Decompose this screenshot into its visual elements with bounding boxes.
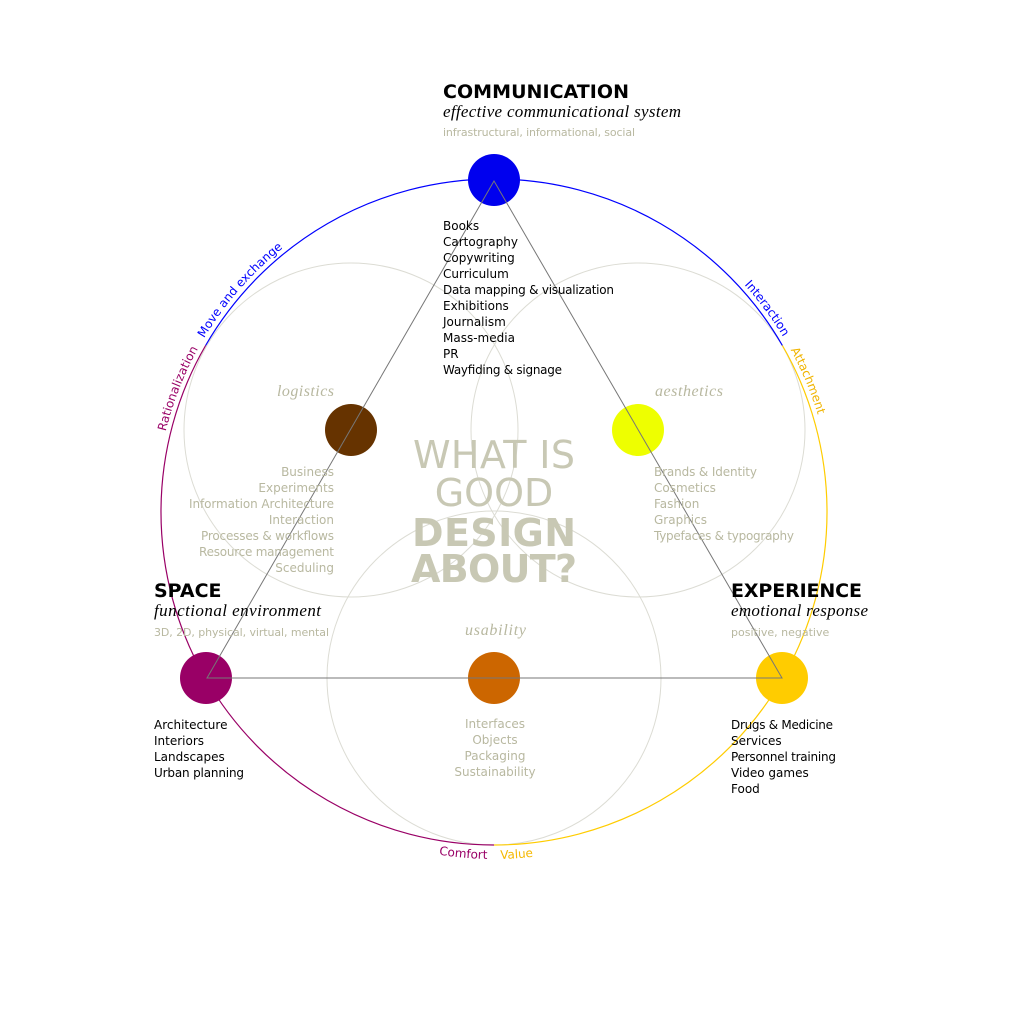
communication list (442, 219, 614, 377)
logistics: Business (281, 465, 334, 479)
experience list: Personnel training (731, 750, 836, 764)
experience heading (731, 580, 868, 639)
communication heading: infrastructural, informational, social (443, 126, 635, 139)
space heading: 3D, 2D, physical, virtual, mental (154, 626, 329, 639)
aesthetics: Typefaces & typography (653, 529, 794, 543)
communication heading: effective communicational system (443, 102, 681, 121)
experience list (731, 718, 836, 796)
logistics: Processes & workflows (201, 529, 334, 543)
center title: ABOUT? (411, 547, 577, 591)
logistics: Interaction (269, 513, 334, 527)
arc labels: Move and exchange (197, 244, 282, 338)
communication list: Copywriting (443, 251, 515, 265)
center title (411, 433, 577, 591)
aesthetics: Cosmetics (654, 481, 716, 495)
aesthetics (653, 383, 794, 543)
communication list: Journalism (442, 315, 506, 329)
triangle (207, 181, 782, 678)
logistics: Information Architecture (189, 497, 334, 511)
experience heading: EXPERIENCE (731, 580, 862, 602)
experience heading: emotional response (731, 601, 868, 620)
communication list: Exhibitions (443, 299, 509, 313)
experience list: Services (731, 734, 782, 748)
outer ring arcs (161, 179, 827, 845)
communication list: Books (443, 219, 479, 233)
aesthetics: Brands & Identity (654, 465, 757, 479)
space list (154, 718, 244, 780)
faint circles (184, 263, 805, 845)
arc labels: Interaction (745, 280, 788, 336)
space list: Architecture (154, 718, 227, 732)
usability: Sustainability (454, 765, 536, 779)
communication list: Curriculum (443, 267, 509, 281)
experience list: Video games (731, 766, 809, 780)
logistics (189, 383, 334, 575)
logistics: Sceduling (275, 561, 334, 575)
center title: GOOD (435, 471, 553, 515)
communication list: Mass-media (443, 331, 515, 345)
center title: WHAT IS (413, 433, 575, 477)
aesthetics: aesthetics (655, 383, 723, 400)
usability (454, 622, 536, 779)
communication heading: COMMUNICATION (443, 81, 629, 103)
space heading: functional environment (154, 601, 322, 620)
arc labels: Rationalization (158, 347, 198, 430)
arc labels: Attachment (790, 348, 825, 414)
experience list: Drugs & Medicine (731, 718, 833, 732)
aesthetics: Fashion (654, 497, 699, 511)
space list: Landscapes (154, 750, 225, 764)
usability: Interfaces (465, 717, 525, 731)
space heading: SPACE (154, 580, 222, 602)
center title: DESIGN (412, 511, 576, 555)
arc labels: Comfort (440, 846, 488, 859)
usability: Packaging (465, 749, 525, 763)
logistics: Resource management (199, 545, 334, 559)
aesthetics: Graphics (654, 513, 707, 527)
arc labels: Value (500, 849, 532, 859)
communication list: Cartography (443, 235, 518, 249)
communication list: Wayfiding & signage (443, 363, 562, 377)
space list: Interiors (154, 734, 204, 748)
usability: usability (465, 622, 527, 639)
space heading (154, 580, 329, 639)
communication list: Data mapping & visualization (443, 283, 614, 297)
communication heading (443, 81, 681, 139)
logistics: logistics (277, 383, 334, 400)
node circles (180, 154, 808, 704)
logistics: Experiments (258, 481, 334, 495)
communication list: PR (443, 347, 459, 361)
usability: Objects (472, 733, 518, 747)
arc labels (158, 244, 825, 859)
experience heading: positive, negative (731, 626, 829, 639)
space list: Urban planning (154, 766, 244, 780)
experience list: Food (731, 782, 760, 796)
